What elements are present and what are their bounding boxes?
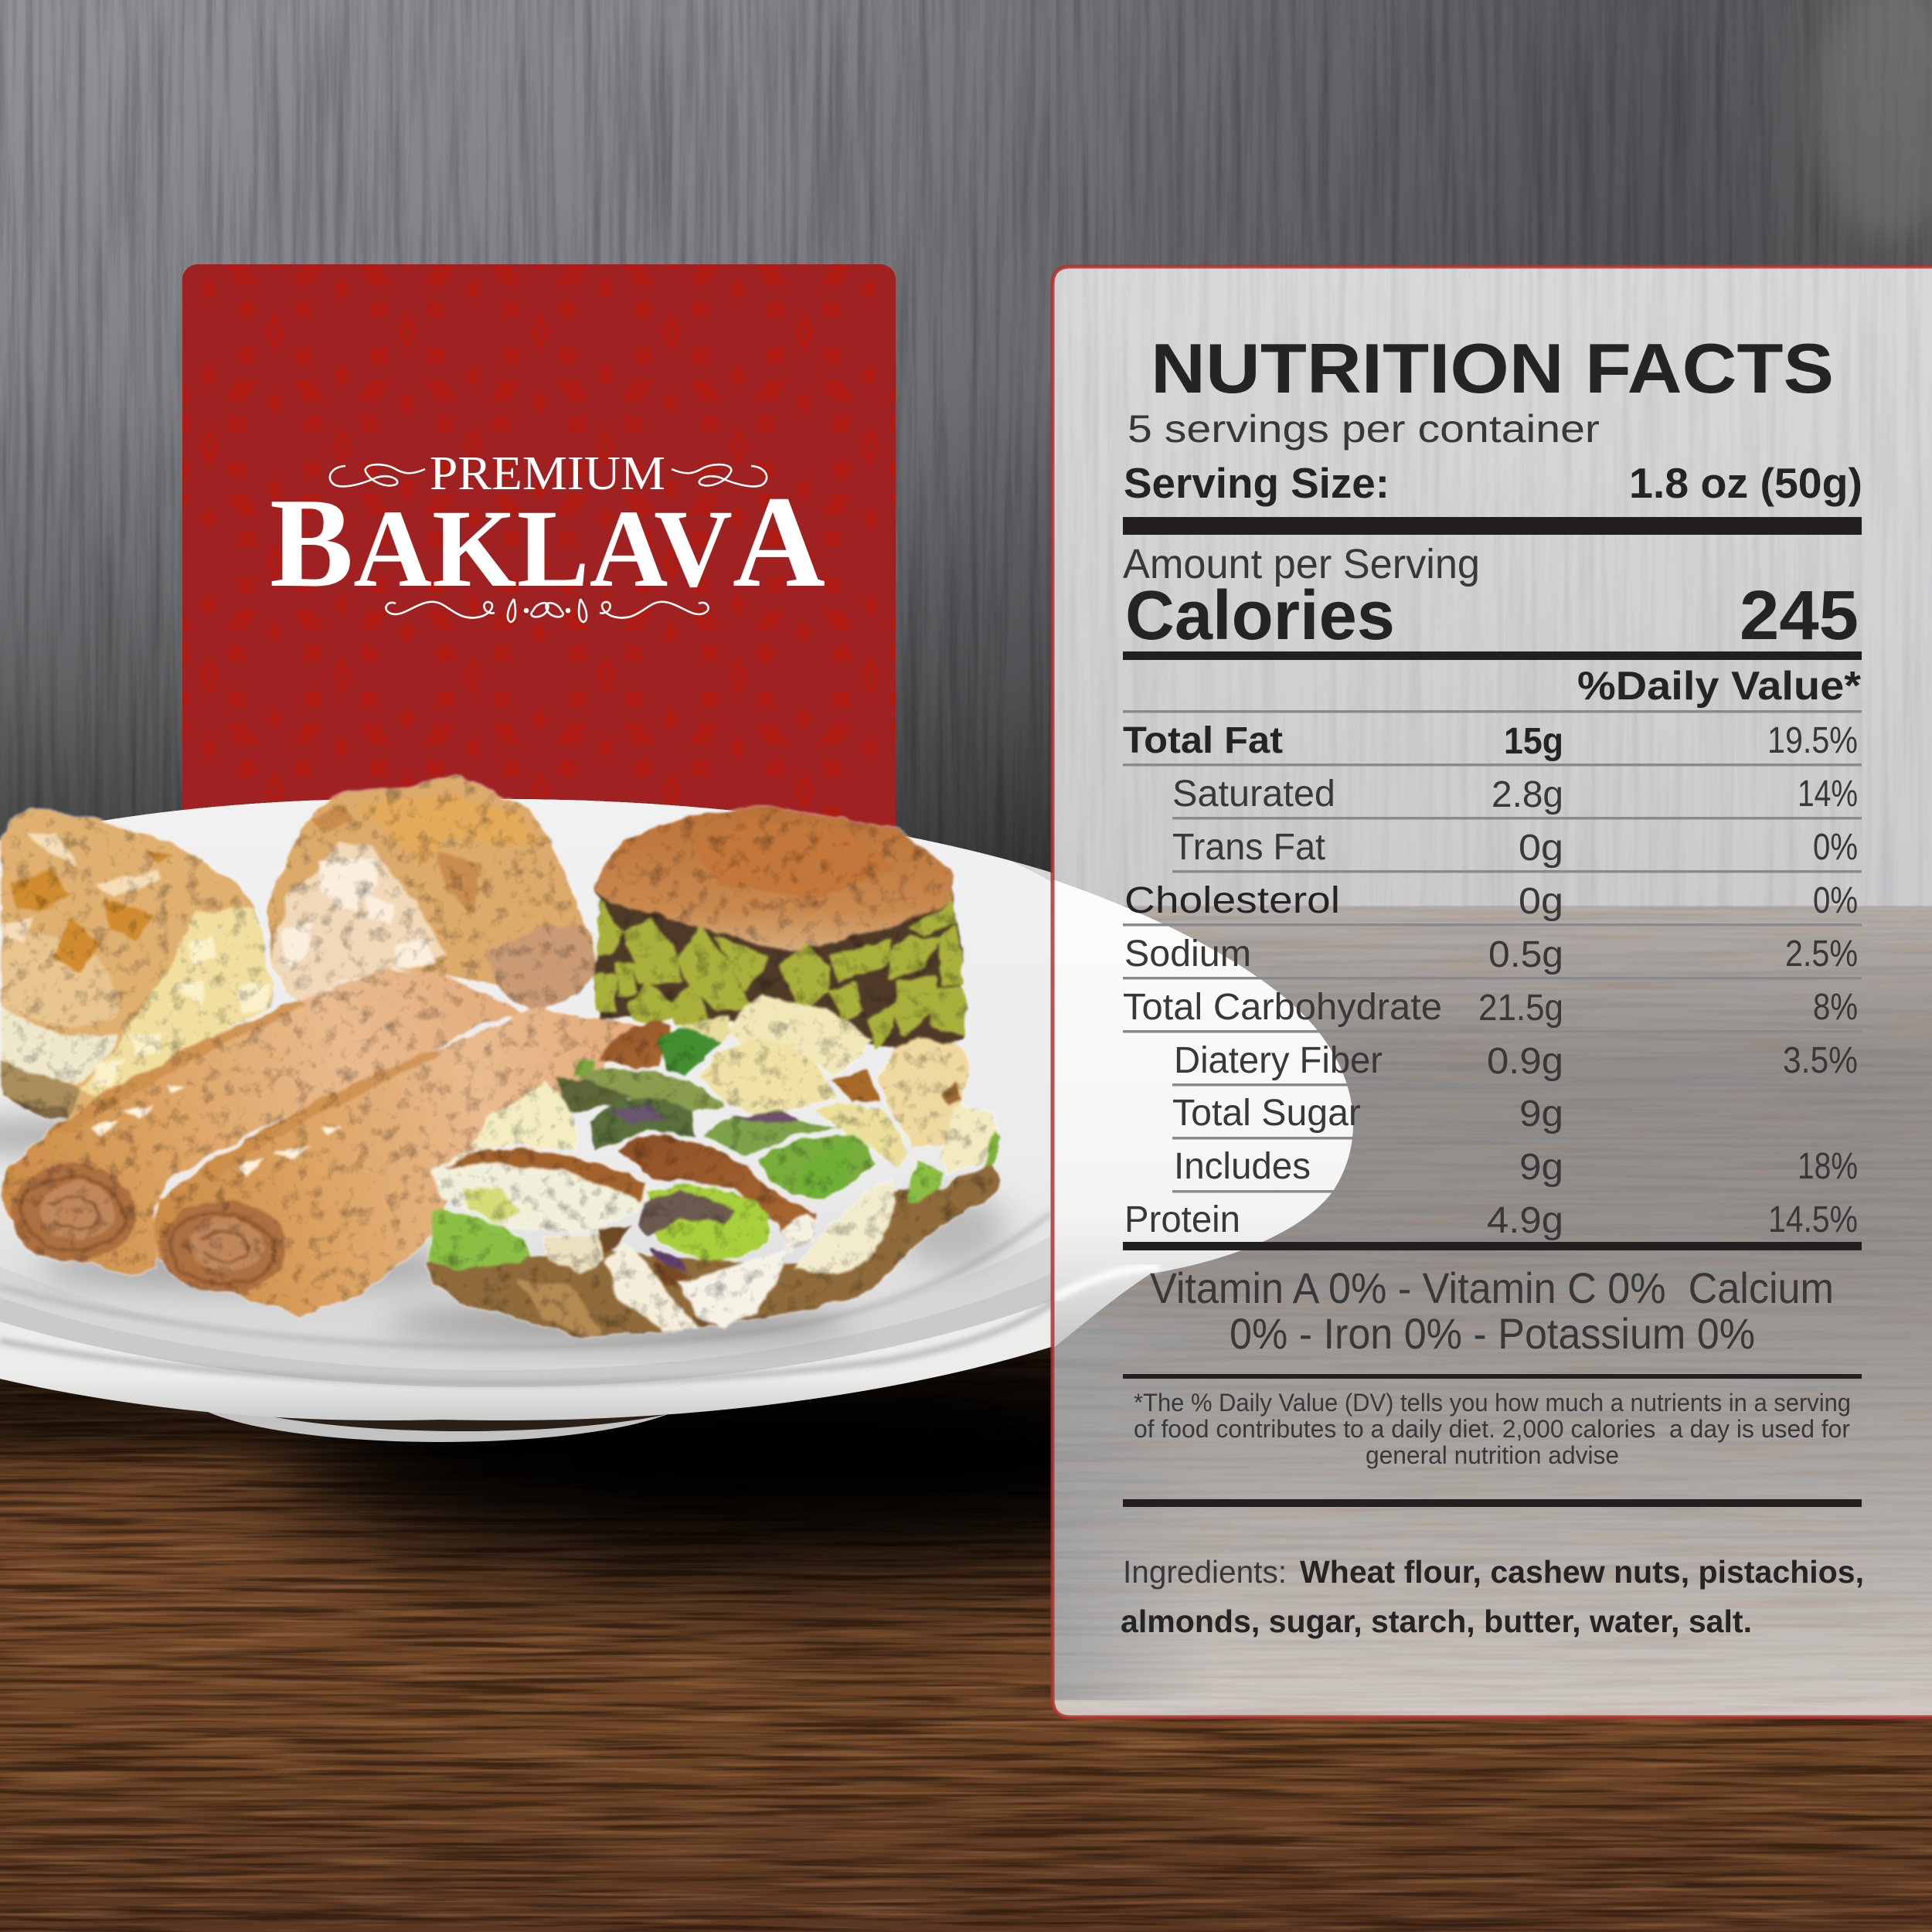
baklava piece: pistachio square [594, 806, 963, 1050]
nutrient table rows: 14% [1798, 774, 1858, 815]
nutrient table rows [1123, 720, 1858, 1241]
vitamins text: 0% - Iron 0% - Potassium 0% [1230, 1309, 1755, 1358]
nutrient table rows: Includes [1174, 1146, 1311, 1187]
nutrient table rows: Saturated [1172, 774, 1335, 815]
serving size row: Serving Size: [1124, 459, 1389, 507]
background wall [0, 0, 1932, 912]
baklava piece: mixed nut bar [427, 995, 1002, 1338]
nutrient table rows: 0% [1813, 827, 1858, 868]
nutrient table rows: Diatery Fiber [1174, 1040, 1383, 1081]
nutrient table rows: Sodium [1124, 934, 1251, 975]
baklava piece: back roll [0, 970, 525, 1275]
daily value header: %Daily Value* [1577, 664, 1862, 709]
nutrient table rows: 0.9g [1487, 1041, 1563, 1082]
nutrition panel [1053, 266, 1932, 1719]
brand title baklava: BAKLAVA [270, 469, 825, 614]
nutrient table rows: 0g [1519, 881, 1563, 922]
heading: nutrition facts: NUTRITION FACTS [1151, 330, 1834, 408]
nutrient table rows: 9g [1519, 1094, 1563, 1134]
nutrient table rows: 19.5% [1767, 720, 1858, 761]
flourish right of premium [672, 464, 767, 486]
nutrient table rows: 2.8g [1492, 774, 1563, 815]
wooden table [0, 906, 1932, 1932]
amount per serving: Amount per Serving [1123, 541, 1480, 587]
nutrient table rows: Total Fat [1123, 720, 1283, 761]
vitamins text [1150, 1264, 1834, 1358]
nutrient table rows: 14.5% [1768, 1199, 1858, 1240]
nutrient table rows: Trans Fat [1172, 827, 1325, 868]
food shadows [0, 1119, 1005, 1342]
red brand card [182, 264, 896, 867]
baklava piece: diamond [0, 808, 272, 1121]
ingredients: Wheat flour, cashew nuts, pistachios, [1300, 1554, 1864, 1590]
nutrient table rows: 0% [1813, 880, 1858, 921]
footnote: general nutrition advise [1366, 1441, 1619, 1469]
baklava piece: rolled top [268, 774, 597, 1011]
plate [0, 799, 1053, 1442]
footnote: of food contributes to a daily diet. 2,000 calories a day is used for [1134, 1415, 1850, 1443]
serving size row: 1.8 oz (50g) [1629, 459, 1862, 507]
nutrient table rows: 9g [1519, 1147, 1563, 1188]
footnote [1134, 1389, 1851, 1469]
nutrient table rows: 0.5g [1488, 934, 1563, 975]
nutrient table rows: 15g [1504, 721, 1563, 762]
nutrient table rows: Protein [1124, 1199, 1240, 1240]
table rules [1123, 710, 1862, 1193]
flourish left of premium [330, 464, 425, 486]
ingredients: Ingredients: [1123, 1554, 1287, 1590]
baklava assortment [0, 774, 1002, 1338]
nutrient table rows: 2.5% [1785, 934, 1858, 975]
ingredients [1121, 1554, 1864, 1639]
nutrient table rows: 3.5% [1783, 1040, 1858, 1081]
nutrient table rows: 18% [1798, 1146, 1858, 1187]
brand title premium: PREMIUM [430, 447, 665, 500]
servings per container: 5 servings per container [1128, 407, 1600, 451]
baklava piece: front roll [154, 1007, 647, 1316]
calories row [1125, 577, 1859, 655]
ornament under title [386, 599, 709, 622]
vitamins text: Vitamin A 0% - Vitamin C 0% Calcium [1150, 1264, 1834, 1312]
nutrient table rows: 21.5g [1478, 988, 1563, 1029]
footnote: *The % Daily Value (DV) tells you how much a nutrients in a serving [1134, 1389, 1851, 1417]
nutrient table rows: 4.9g [1487, 1200, 1563, 1241]
nutrient table rows: 8% [1813, 987, 1858, 1028]
calories row: Calories [1125, 577, 1395, 655]
nutrient table rows: 0g [1519, 828, 1563, 869]
serving size row [1124, 459, 1862, 507]
ingredients: almonds, sugar, starch, butter, water, salt. [1121, 1604, 1752, 1639]
nutrient table rows: Total Carbohydrate [1123, 987, 1442, 1028]
calories row: 245 [1740, 577, 1859, 655]
nutrient table rows: Total Sugar [1172, 1093, 1361, 1134]
nutrient table rows: Cholesterol [1124, 880, 1340, 921]
